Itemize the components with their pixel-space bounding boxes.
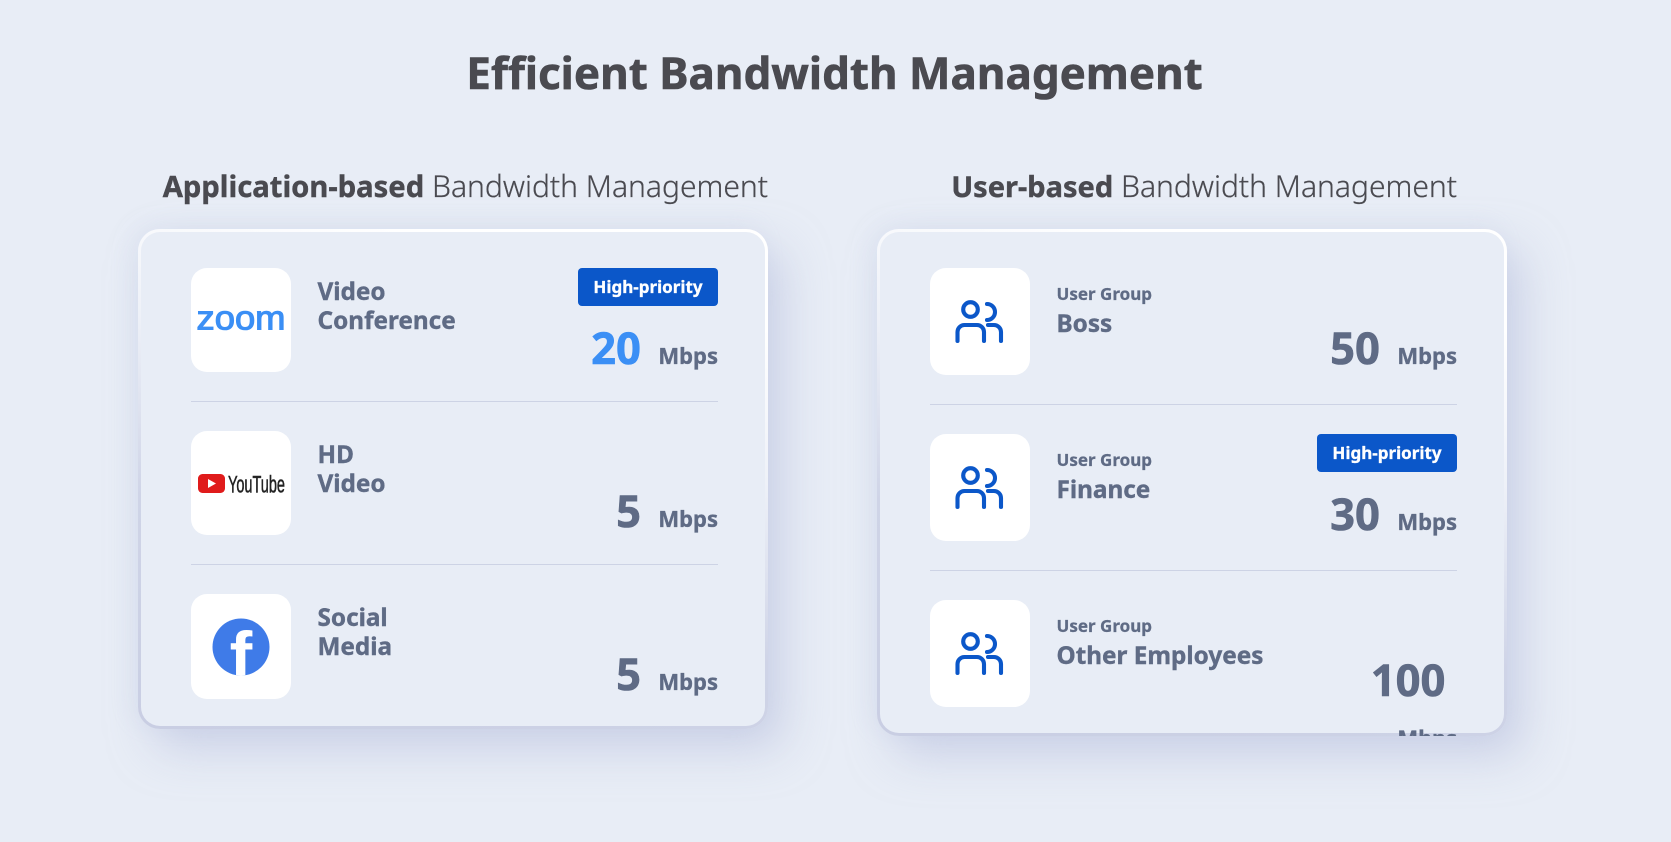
icon box: users — [930, 268, 1030, 375]
unit: Mbps: Mbps — [658, 504, 718, 534]
value: 100: 100 — [1371, 649, 1446, 709]
label: user group: User Group — [1056, 282, 1152, 305]
label: finance: Finance — [1056, 473, 1150, 506]
label: user group: User Group — [1056, 448, 1152, 471]
label: video conference: Video — [318, 275, 386, 308]
value: 20: 20 — [591, 317, 641, 377]
badge: high-priority: High-priority — [593, 275, 703, 298]
icon: zoom logo — [191, 268, 291, 372]
badge: high-priority — [1317, 434, 1457, 472]
value: 5: 5 — [616, 643, 641, 703]
panel: user-based bandwidth — [877, 229, 1507, 736]
icon: zoom logo: zoom — [196, 300, 286, 338]
unit: Mbps: Mbps — [658, 667, 718, 697]
heading: application-based: Application-based Bandwidth Management — [163, 165, 768, 206]
value: 50: 50 — [1330, 317, 1380, 377]
label: hd video: Video — [318, 467, 386, 500]
label: other employees: Other Employees — [1056, 639, 1263, 672]
row: social media — [191, 594, 718, 703]
label: video conference: Conference — [318, 304, 456, 337]
unit: Mbps: Mbps — [1397, 341, 1457, 371]
unit: Mbps: Mbps — [1397, 507, 1457, 537]
badge: high-priority — [578, 268, 718, 306]
heading: user-based: User-based Bandwidth Management — [951, 165, 1457, 206]
icon box: users — [930, 600, 1030, 707]
row: other employees — [930, 600, 1457, 754]
row: video conference — [191, 268, 718, 377]
label: social media: Media — [318, 630, 392, 663]
icon: facebook logo — [191, 594, 291, 699]
label: boss: Boss — [1056, 307, 1112, 340]
icon: youtube logo: YouTube — [228, 472, 285, 498]
row: hd video — [191, 431, 718, 540]
unit: Mbps: Mbps — [658, 341, 718, 371]
panel: application-based bandwidth — [138, 229, 768, 729]
label: social media: Social — [318, 601, 388, 634]
icon box: users — [930, 434, 1030, 541]
icon: youtube logo — [191, 431, 291, 535]
row: boss — [930, 268, 1457, 377]
value: 5: 5 — [616, 480, 641, 540]
label: hd video: HD — [318, 438, 354, 471]
badge: high-priority: High-priority — [1332, 441, 1442, 464]
label: user group: User Group — [1056, 614, 1152, 637]
icon: facebook logo: f — [230, 618, 253, 694]
row: finance — [930, 434, 1457, 543]
value: 30: 30 — [1330, 483, 1380, 543]
